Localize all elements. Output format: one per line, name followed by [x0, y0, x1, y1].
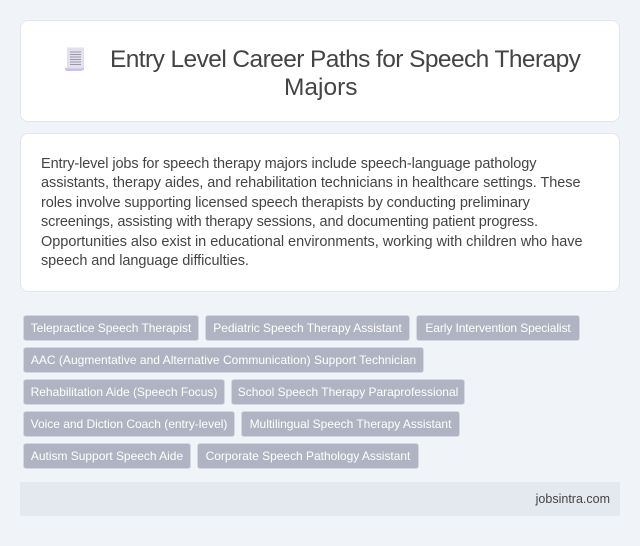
- tag: AAC (Augmentative and Alternative Communication) Support Technician: [31, 353, 416, 367]
- title: Entry Level Career Paths for Speech Therapy: [110, 46, 580, 73]
- footer text: jobsintra.com: [536, 492, 610, 506]
- tag: [23, 347, 424, 373]
- tag: Corporate Speech Pathology Assistant: [206, 449, 410, 463]
- footer bar: [20, 482, 620, 516]
- tag: [23, 315, 199, 341]
- tag: [23, 379, 225, 405]
- tag: [23, 443, 191, 469]
- panel: description card: [20, 133, 620, 292]
- text block: description: speech and language difficulties.: [41, 253, 249, 269]
- tag: [416, 315, 580, 341]
- tag: Pediatric Speech Therapy Assistant: [213, 321, 402, 335]
- tag: School Speech Therapy Paraprofessional: [238, 385, 458, 399]
- tag: Autism Support Speech Aide: [31, 449, 183, 463]
- tag: [231, 379, 465, 405]
- text block: description: Opportunities also exist in educational environments, working with children who have: [41, 234, 583, 250]
- title: [110, 46, 581, 101]
- tag: [205, 315, 410, 341]
- text block: description: roles involve supporting licensed speech therapists by conducting preliminary: [41, 194, 530, 210]
- icon: paper scroll document: [65, 48, 84, 71]
- tag: Multilingual Speech Therapy Assistant: [250, 417, 451, 431]
- text block: description: [41, 156, 583, 269]
- panel: header card: [20, 20, 620, 122]
- text block: description: screenings, assisting with therapy sessions, and documenting patient progress.: [41, 214, 538, 230]
- tag: Rehabilitation Aide (Speech Focus): [31, 385, 217, 399]
- tag: [23, 411, 235, 437]
- title: Majors: [284, 74, 358, 101]
- text block: description: Entry-level jobs for speech therapy majors include speech-language pathology: [41, 156, 536, 172]
- tag list: career paths: [23, 315, 580, 469]
- tag: Voice and Diction Coach (entry-level): [31, 417, 227, 431]
- tag: Telepractice Speech Therapist: [31, 321, 191, 335]
- tag: Early Intervention Specialist: [425, 321, 571, 335]
- text block: description: assistants, therapy aides, and rehabilitation technicians in healthcare settings. These: [41, 175, 580, 191]
- tag: [197, 443, 419, 469]
- tag: [241, 411, 460, 437]
